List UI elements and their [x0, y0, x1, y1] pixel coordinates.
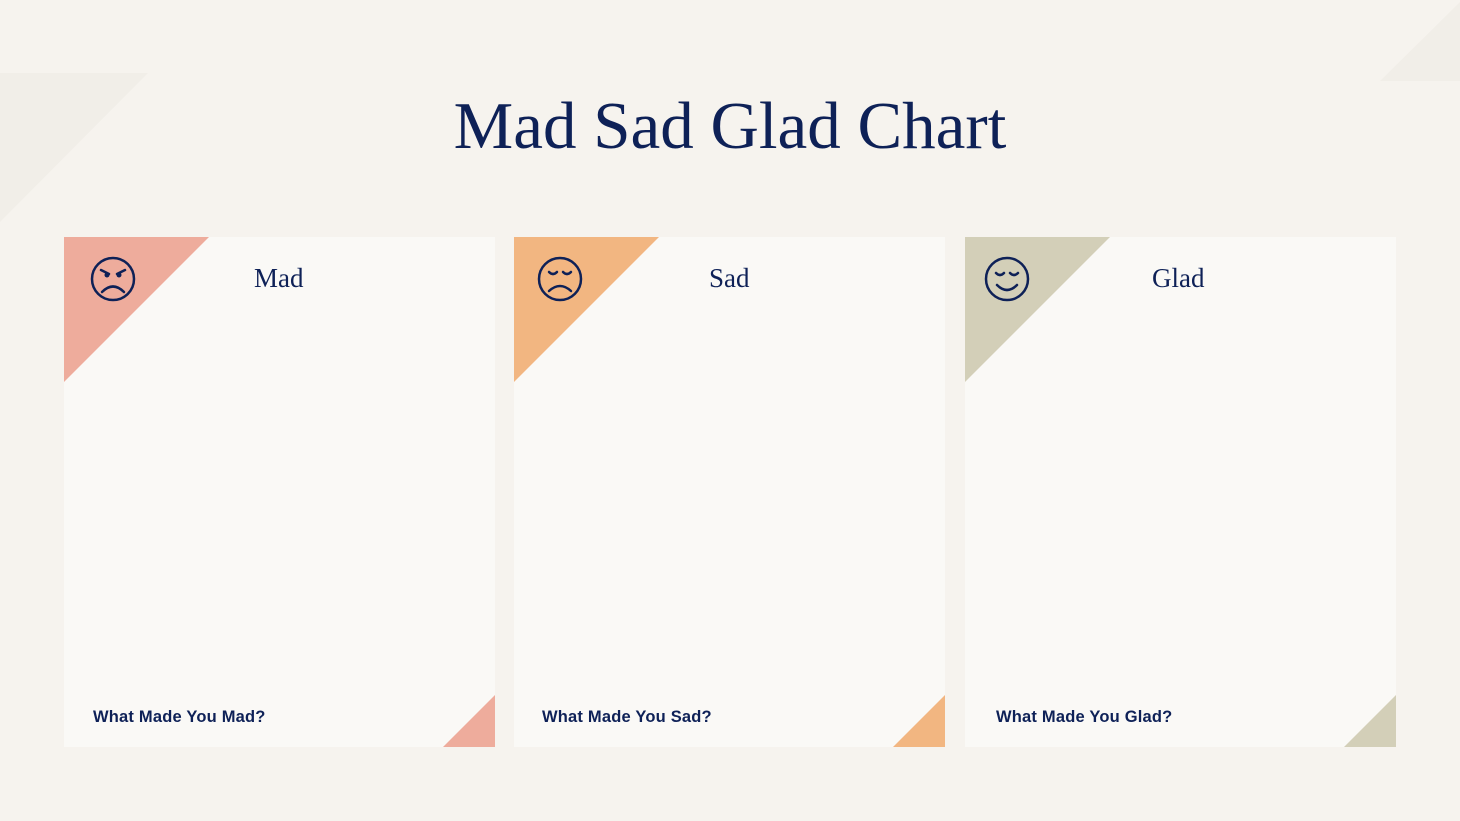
title: Mad Sad Glad Chart [454, 89, 1006, 163]
panel: sad: What Made You Sad? [542, 708, 712, 726]
panel: sad [514, 237, 945, 747]
panel: sad: Sad [709, 263, 750, 293]
panel: glad: What Made You Glad? [996, 708, 1172, 726]
panel: mad: Mad [254, 263, 304, 293]
panel: glad: Glad [1152, 263, 1204, 293]
panel: mad [64, 237, 495, 747]
panel: mad: What Made You Mad? [93, 708, 266, 726]
panel: glad [965, 237, 1396, 747]
